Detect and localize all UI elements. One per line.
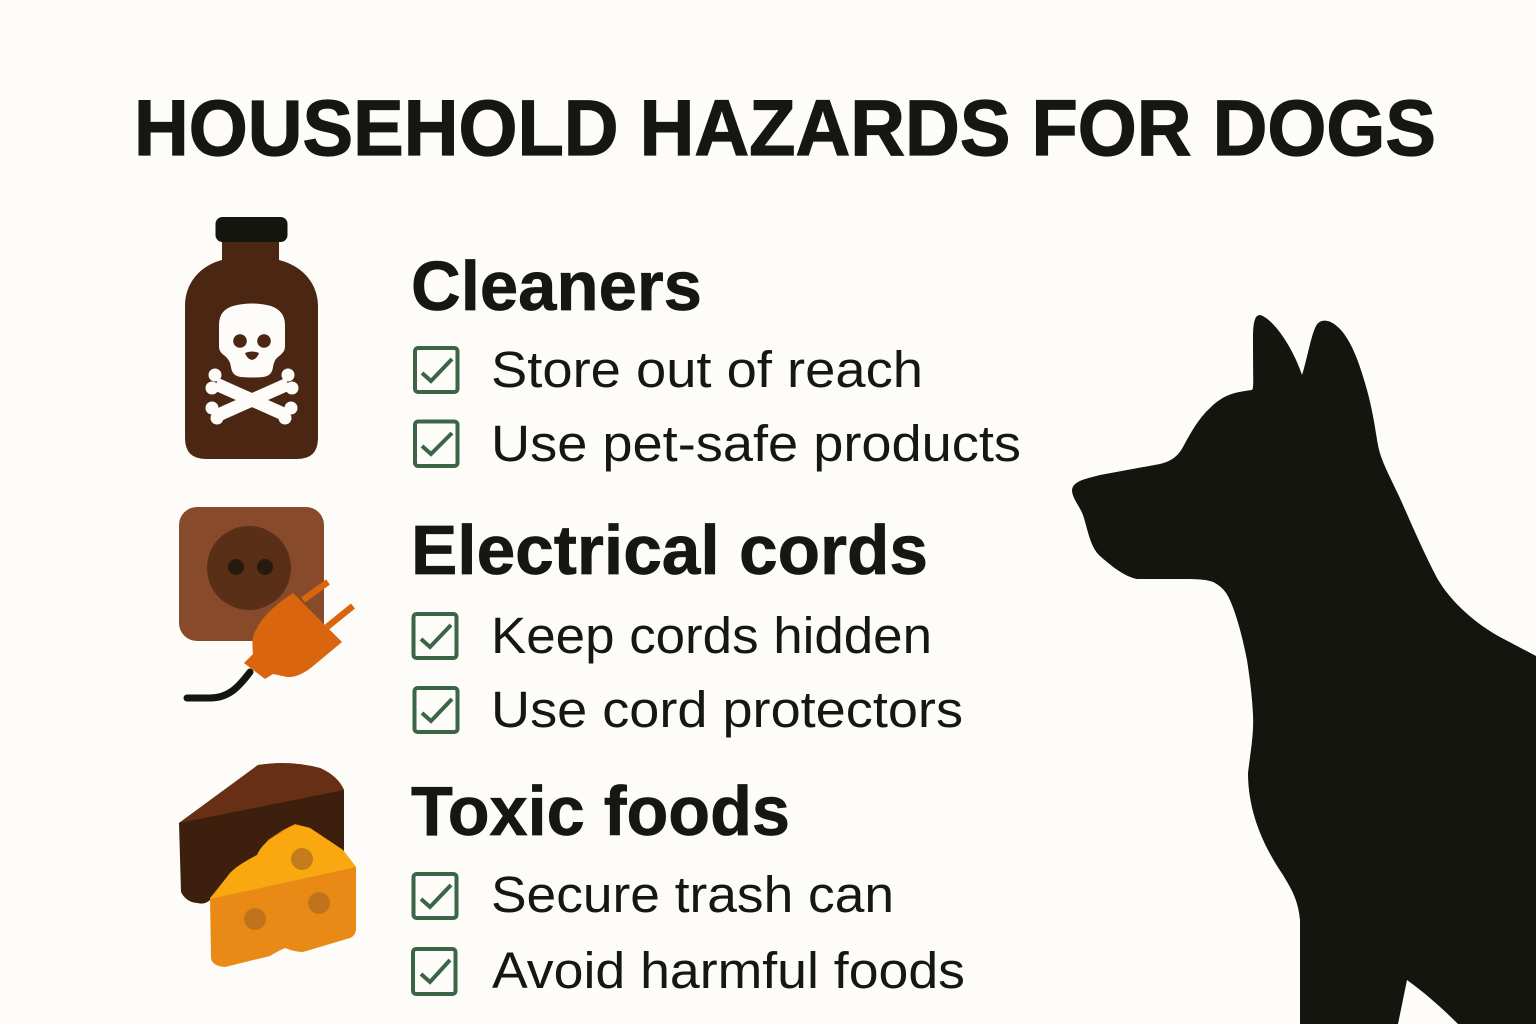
icon: outlet and plug	[179, 507, 353, 698]
checklist item: use pet-safe products: Use pet-safe products	[491, 415, 1021, 472]
dog silhouette	[1072, 315, 1536, 1024]
icon: chocolate and cheese	[179, 763, 356, 967]
heading: cleaners: Cleaners	[411, 247, 702, 325]
title: HOUSEHOLD HAZARDS FOR DOGS	[134, 83, 1436, 172]
checklist item: avoid harmful foods: Avoid harmful foods	[492, 942, 965, 999]
heading: toxic foods: Toxic foods	[411, 772, 790, 850]
checklist item: keep cords hidden: Keep cords hidden	[491, 607, 932, 664]
heading: electrical cords: Electrical cords	[411, 511, 928, 589]
checklist item: secure trash can: Secure trash can	[491, 866, 894, 923]
checklist item: use cord protectors: Use cord protectors	[491, 681, 963, 738]
checklist item: store out of reach: Store out of reach	[491, 341, 923, 398]
icon: poison bottle	[185, 217, 318, 459]
